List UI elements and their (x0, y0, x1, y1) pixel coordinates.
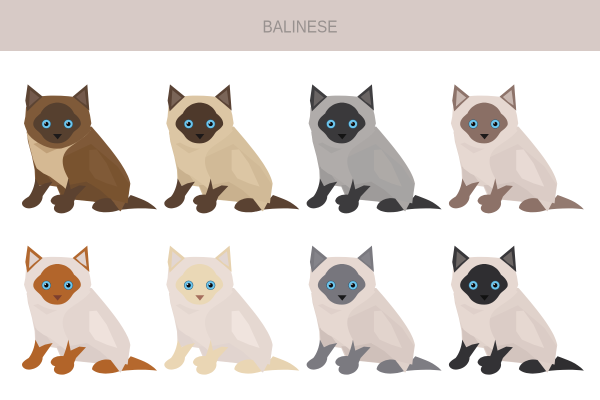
legs (22, 340, 119, 375)
legs (307, 340, 404, 375)
head (24, 96, 91, 149)
face mask (460, 103, 508, 143)
head (166, 257, 234, 310)
face mask (176, 103, 223, 143)
legs (22, 178, 119, 213)
ears (25, 246, 89, 273)
ears (452, 84, 516, 111)
nose (480, 295, 489, 301)
cat 5: red point kitten (22, 246, 157, 375)
face mask (33, 103, 81, 143)
body (27, 288, 130, 373)
nose (338, 134, 347, 139)
eyes (326, 119, 358, 129)
head (309, 96, 376, 149)
tail (261, 356, 299, 371)
legs (307, 178, 404, 213)
title: BALINESE: BALINESE (262, 16, 338, 36)
head (451, 96, 518, 149)
face mask (176, 264, 223, 305)
face mask (460, 264, 508, 305)
head (24, 257, 91, 310)
legs (164, 178, 262, 213)
head (451, 257, 518, 310)
legs (449, 340, 546, 375)
ears (310, 84, 374, 111)
eyes (326, 281, 358, 290)
body (454, 288, 557, 373)
eyes (42, 119, 73, 129)
nose (338, 295, 347, 301)
tail (403, 356, 442, 371)
face mask (318, 264, 365, 305)
ears (310, 246, 374, 273)
cat 2: seal point on cream kitten (164, 84, 299, 213)
ears (25, 84, 89, 111)
title banner (0, 0, 600, 51)
legs (449, 178, 546, 213)
body (454, 127, 557, 211)
ears (168, 246, 232, 273)
head (309, 257, 376, 310)
eyes (42, 281, 73, 290)
body (169, 288, 273, 373)
tail (118, 356, 157, 371)
tail (118, 195, 157, 210)
cat 3: grey kitten (307, 84, 442, 213)
nose (53, 295, 62, 301)
face mask (33, 264, 81, 305)
tail (403, 195, 442, 210)
cat 8: black point kitten (449, 246, 584, 375)
body (311, 127, 415, 211)
ears (168, 84, 232, 111)
eyes (469, 119, 500, 129)
nose (195, 134, 204, 139)
ears (452, 246, 516, 273)
cat 7: blue point kitten (307, 246, 442, 375)
head (166, 96, 234, 149)
cat 4: chocolate point kitten (449, 84, 584, 213)
eyes (184, 119, 215, 129)
face mask (318, 103, 365, 143)
body (311, 288, 415, 373)
tail (261, 195, 299, 210)
tail (545, 195, 584, 210)
nose (195, 295, 204, 301)
body (27, 127, 130, 211)
eyes (184, 281, 215, 290)
nose (53, 134, 62, 139)
cat 6: cream point kitten (164, 246, 299, 375)
eyes (469, 281, 500, 290)
cat 1: seal brown kitten (22, 84, 157, 213)
body (169, 127, 273, 211)
tail (545, 356, 584, 371)
nose (480, 134, 489, 139)
legs (164, 340, 262, 375)
